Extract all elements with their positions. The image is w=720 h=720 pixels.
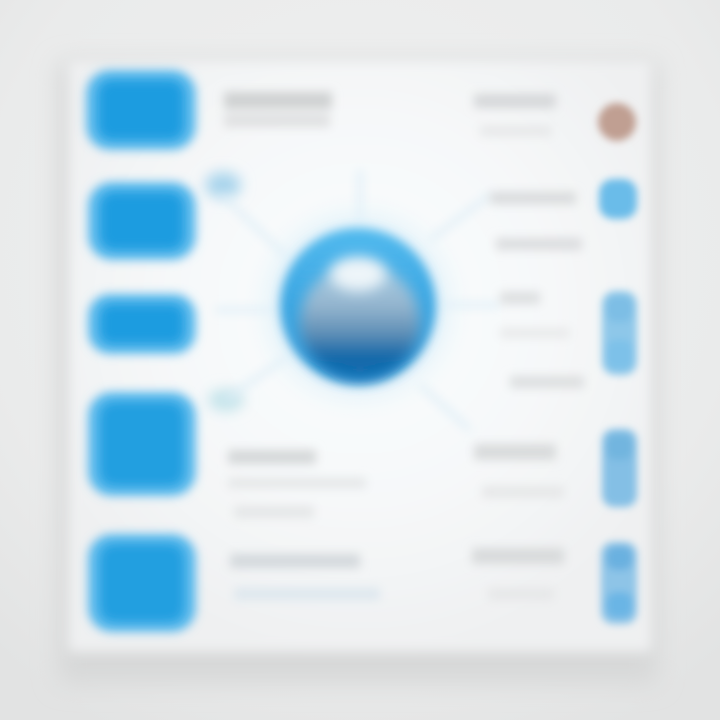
text block top bbox=[224, 92, 332, 127]
text row 2 bbox=[490, 192, 582, 250]
icon brown circle bbox=[598, 103, 636, 141]
left column: blue tiles bbox=[86, 70, 196, 632]
icon blue 3 bbox=[606, 340, 633, 370]
tile 3 bbox=[100, 304, 184, 344]
tag lower bbox=[208, 389, 244, 411]
tile 2 halo bbox=[88, 182, 196, 260]
connectors bbox=[215, 170, 500, 430]
icon column 2 bbox=[602, 291, 637, 375]
icon column 4 bbox=[601, 542, 637, 624]
text row 1 bbox=[474, 94, 556, 136]
text block middle bbox=[228, 450, 366, 518]
tile 1 halo bbox=[86, 70, 196, 150]
text block bottom bbox=[230, 554, 380, 600]
main panel bbox=[68, 60, 652, 652]
panel shadow bbox=[58, 62, 658, 684]
icon blue 5 bbox=[606, 546, 633, 570]
tile 3 halo bbox=[88, 294, 196, 354]
tile 5 bbox=[100, 544, 184, 622]
hub glow bbox=[266, 214, 450, 398]
text row 3 bbox=[500, 292, 584, 388]
icon blue 1 bbox=[599, 179, 637, 219]
icon blue 6 bbox=[606, 592, 633, 618]
hub inner shading bbox=[300, 264, 420, 380]
tile 4 bbox=[100, 402, 184, 486]
icon blue 2 bbox=[606, 296, 633, 322]
left text placeholders bbox=[224, 92, 380, 600]
connector lines around the hub bbox=[215, 170, 500, 430]
icon blue 4 bbox=[606, 434, 633, 460]
tile 2 bbox=[100, 192, 184, 250]
tag upper bbox=[205, 172, 241, 198]
tile 4 halo bbox=[88, 392, 196, 496]
hub disc bbox=[280, 228, 436, 384]
tile 5 halo bbox=[88, 534, 196, 632]
right text placeholders bbox=[472, 94, 584, 600]
right icons bbox=[598, 103, 637, 624]
hub highlight bbox=[330, 257, 386, 291]
small tags beside tiles bbox=[205, 172, 244, 411]
tile 1 bbox=[98, 80, 184, 140]
central hub bbox=[266, 214, 450, 398]
icon column 3 bbox=[602, 429, 637, 507]
text row 5 bbox=[472, 548, 564, 600]
text row 4 bbox=[474, 444, 564, 498]
